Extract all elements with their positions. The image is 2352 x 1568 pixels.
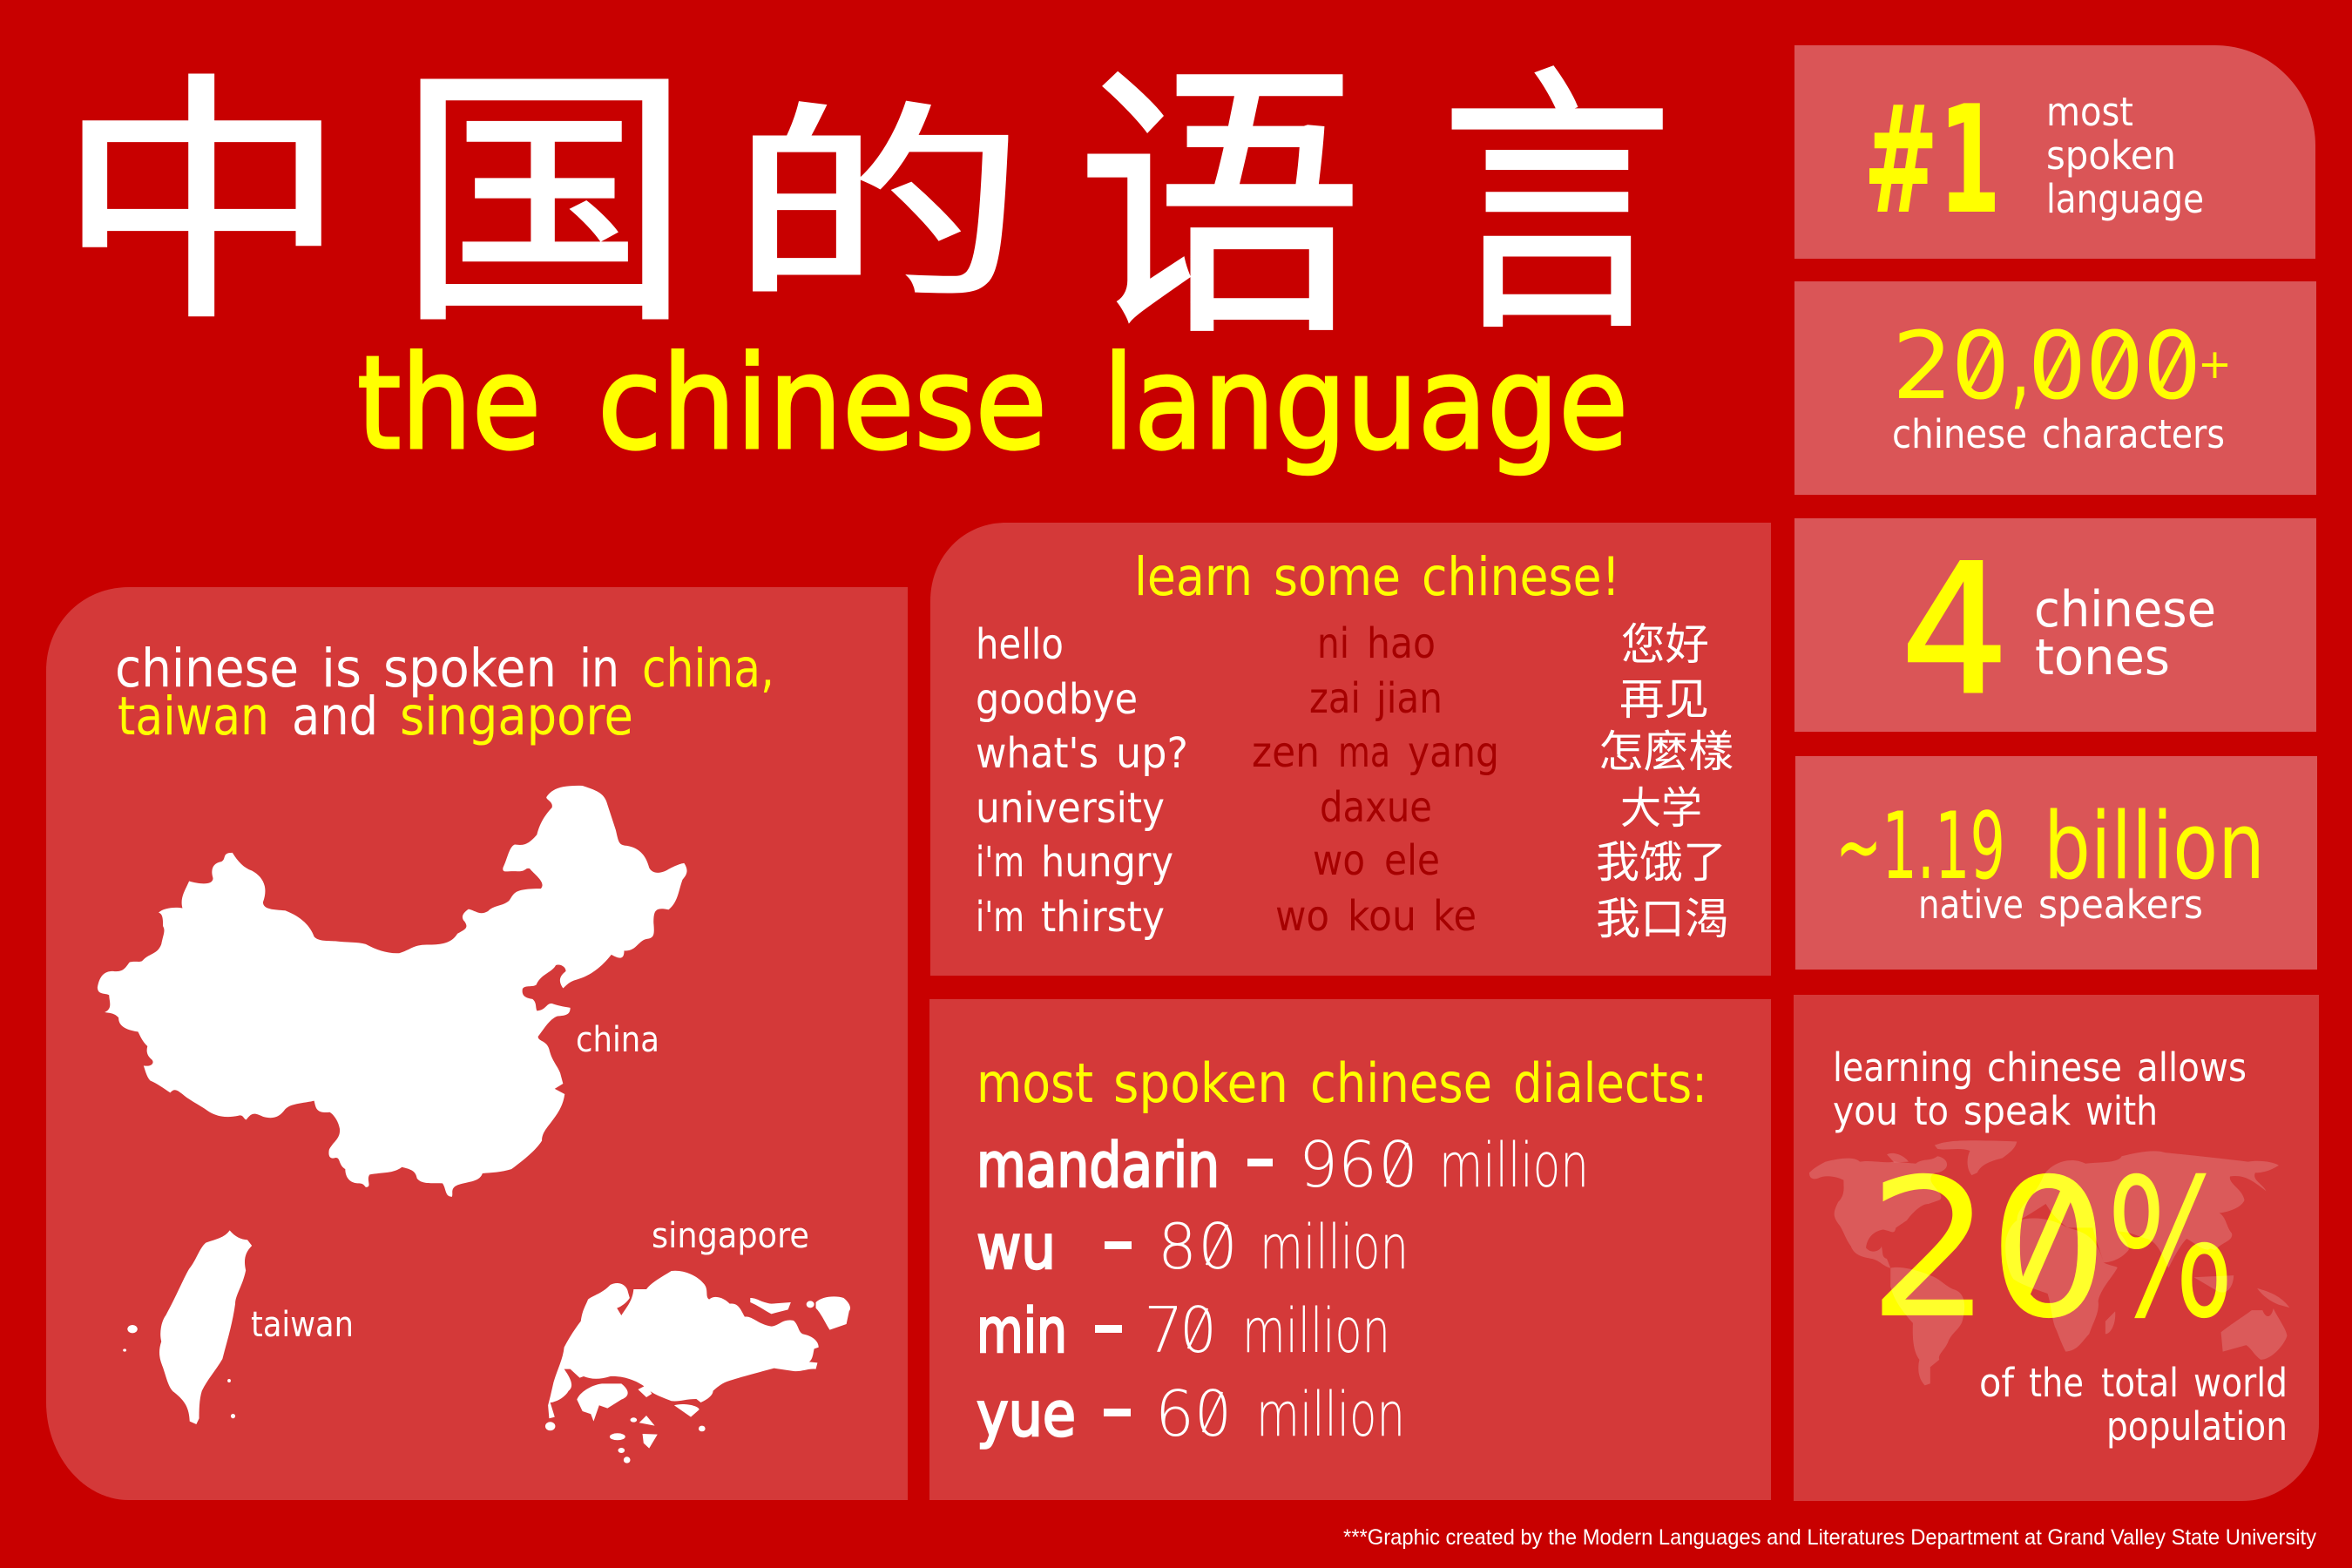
- phrases in english: university: [976, 784, 1165, 833]
- heading: where spoken: chinese: [115, 638, 299, 700]
- heading: where spoken: [115, 638, 774, 747]
- map: china: [98, 786, 687, 1197]
- caption: most spoken language: [2046, 89, 2204, 222]
- stat: 20%: 0: [1989, 1138, 2109, 1361]
- chinese title: 国: [396, 51, 693, 355]
- heading: where spoken: china,: [642, 638, 774, 700]
- stat: 20,000+: 0: [2028, 313, 2086, 421]
- phrases in english: hungry: [1041, 838, 1173, 887]
- phrases in pinyin: daxue: [1320, 783, 1432, 832]
- stat: #1: #1: [1863, 74, 2001, 247]
- caption: chinese tones: tones: [2035, 629, 2170, 686]
- world map: [1809, 1140, 2289, 1385]
- caption: chinese characters: chinese: [1892, 411, 2027, 457]
- caption: most spoken language: spoken: [2046, 132, 2176, 179]
- stat: 1.19 billion: [1835, 793, 2265, 900]
- phrases in chinese characters: 再见: [1619, 675, 1709, 724]
- stat: 20,000+: 2: [1892, 313, 1953, 421]
- heading: learn some chinese: some: [1274, 546, 1401, 608]
- phrases in pinyin: zen: [1252, 728, 1320, 777]
- phrases in pinyin: hao: [1367, 619, 1436, 668]
- chinese title: 言: [1440, 49, 1673, 363]
- english title: the: [357, 328, 541, 478]
- caption: learning chinese allows: with: [2085, 1088, 2158, 1134]
- phrases in pinyin: yang: [1408, 728, 1499, 777]
- phrases in pinyin: ni: [1317, 619, 1349, 668]
- caption: native speakers: [1918, 882, 2203, 928]
- stat: 20,000+: +: [2198, 341, 2232, 389]
- dialect: yue: million: [1256, 1379, 1405, 1450]
- dialect: yue: 0: [1194, 1377, 1232, 1450]
- dialect: wu: million: [1260, 1212, 1409, 1283]
- phrases in pinyin: zai: [1309, 674, 1361, 723]
- dialect: mandarin: [977, 1128, 1589, 1201]
- stat: 20,000+: 0: [2085, 313, 2144, 421]
- phrases in chinese characters: 我饿了: [1596, 838, 1727, 887]
- phrases in chinese characters: 我口渴: [1596, 895, 1729, 943]
- caption: learning chinese allows: learning: [1833, 1044, 1973, 1091]
- english title: [357, 328, 1628, 478]
- stat: 20%: 2: [1868, 1138, 1992, 1361]
- phrases in english: goodbye: [976, 675, 1138, 724]
- english title: language: [1103, 328, 1628, 478]
- panel: dialects: [929, 999, 1771, 1500]
- map: singapore: [545, 1271, 850, 1463]
- caption: of the total world population: [1979, 1360, 2288, 1450]
- dialect: mandarin: 96: [1299, 1128, 1377, 1201]
- heading: where spoken: singapore: [400, 686, 633, 747]
- heading: dialects: [977, 1051, 1707, 1115]
- caption: chinese tones: chinese: [2034, 581, 2216, 639]
- heading: dialects: chinese: [1310, 1051, 1492, 1115]
- stat: 20,000+: [1892, 313, 2232, 421]
- heading: where spoken: is: [321, 638, 362, 700]
- dialect: mandarin: million: [1439, 1130, 1589, 1201]
- dialect: min: min: [977, 1295, 1067, 1367]
- caption: most spoken language: most: [2046, 89, 2133, 135]
- stat: 20,000+: 0: [2143, 313, 2201, 421]
- phrases in english: i'm: [976, 838, 1024, 887]
- heading: where spoken: taiwan: [118, 686, 269, 747]
- phrases in pinyin: ke: [1433, 892, 1477, 941]
- panel: learn some chinese: [930, 523, 1771, 976]
- phrases in pinyin: ma: [1338, 728, 1390, 777]
- stat: 20%: %: [2106, 1138, 2234, 1361]
- chinese title: 的: [728, 90, 1028, 323]
- panel: characters: [1794, 281, 2316, 495]
- panel: where chinese is spoken: [46, 587, 908, 1500]
- stat: 20,000+: ,: [2010, 313, 2031, 421]
- dialect: wu: wu: [977, 1212, 1056, 1283]
- caption: of the total world population: population: [2106, 1403, 2288, 1450]
- dialect: wu: 8: [1158, 1210, 1197, 1283]
- heading: where spoken: spoken: [383, 638, 557, 700]
- dialect: wu: [977, 1210, 1409, 1283]
- caption: native speakers: native: [1918, 882, 2024, 928]
- stat: 20%: [1868, 1138, 2234, 1361]
- caption: of the total world population: world: [2193, 1360, 2288, 1406]
- heading: learn some chinese: learn: [1134, 546, 1253, 608]
- caption: of the total world population: of: [1979, 1360, 2015, 1406]
- heading: dialects: dialects:: [1513, 1051, 1707, 1115]
- dialect: min: [977, 1294, 1390, 1367]
- phrases in chinese characters: [1596, 620, 1734, 943]
- caption: learning chinese allows: allows: [2137, 1044, 2247, 1091]
- caption: most spoken language: language: [2046, 176, 2204, 222]
- stat: 20,000+: 0: [1951, 313, 2010, 421]
- dialect: min: million: [1242, 1295, 1390, 1367]
- panel: tones: [1794, 518, 2316, 734]
- english title: chinese: [598, 328, 1047, 478]
- caption: learning chinese allows: to: [1914, 1088, 1949, 1134]
- panel: most spoken language: [1794, 45, 2315, 259]
- phrases in chinese characters: 怎麼樣: [1598, 727, 1734, 776]
- panel: world population: [1794, 995, 2319, 1501]
- label: taiwan: taiwan: [251, 1305, 354, 1345]
- map: taiwan: [123, 1230, 252, 1424]
- panel: native speakers: [1795, 756, 2317, 970]
- heading: learn some chinese: [1134, 546, 1620, 608]
- chinese title: [56, 46, 1673, 368]
- phrases in pinyin: ele: [1384, 836, 1440, 885]
- dialect: yue: yue: [977, 1379, 1076, 1450]
- dialect: mandarin: 0: [1378, 1128, 1418, 1201]
- dialect: yue: [977, 1377, 1405, 1450]
- caption: native speakers: speakers: [2038, 882, 2203, 928]
- dialect: min: 0: [1179, 1294, 1217, 1367]
- stat: 4: 4: [1901, 527, 2009, 734]
- heading: learn some chinese: chinese!: [1422, 546, 1620, 608]
- caption: chinese characters: [1892, 411, 2225, 457]
- label: china: china: [576, 1020, 659, 1060]
- label: singapore: singapore: [652, 1216, 809, 1256]
- phrases in english: hello: [976, 620, 1064, 669]
- dialect: min: 7: [1144, 1294, 1184, 1367]
- dialect: mandarin: mandarin: [977, 1130, 1220, 1201]
- heading: where spoken: and: [292, 686, 378, 747]
- phrases in pinyin: wo: [1275, 892, 1329, 941]
- phrases in pinyin: wo: [1313, 836, 1365, 885]
- heading: dialects: most: [977, 1051, 1093, 1115]
- caption: chinese tones: [2034, 581, 2216, 686]
- phrases in english: up?: [1116, 729, 1188, 778]
- credit line: ***Graphic created by the Modern Languages and Literatures Department at Grand Valley State University: [1343, 1525, 2316, 1550]
- chinese title: 中: [56, 59, 348, 350]
- phrases in english: [976, 620, 1188, 942]
- stat: 1.19 billion: ~1.19: [1835, 793, 2005, 900]
- phrases in pinyin: [1252, 619, 1499, 941]
- phrases in pinyin: jian: [1375, 674, 1443, 723]
- heading: where spoken: in: [579, 638, 619, 700]
- heading: dialects: spoken: [1113, 1051, 1288, 1115]
- caption: learning chinese allows: speak: [1963, 1088, 2071, 1134]
- stat: 1.19 billion: billion: [2044, 793, 2265, 900]
- caption: of the total world population: total: [2101, 1360, 2179, 1406]
- caption: chinese characters: characters: [2042, 411, 2225, 457]
- phrases in english: what's: [976, 729, 1098, 778]
- caption: learning chinese allows: [1833, 1044, 2247, 1134]
- phrases in chinese characters: 您好: [1621, 620, 1709, 669]
- caption: of the total world population: the: [2029, 1360, 2084, 1406]
- phrases in pinyin: kou: [1348, 892, 1416, 941]
- caption: learning chinese allows: you: [1833, 1088, 1898, 1134]
- chinese title: 语: [1076, 46, 1363, 368]
- dialect: yue: 6: [1155, 1377, 1194, 1450]
- caption: learning chinese allows: chinese: [1987, 1044, 2122, 1091]
- dialect: wu: 0: [1198, 1210, 1238, 1283]
- phrases in english: thirsty: [1041, 893, 1165, 942]
- phrases in english: i'm: [976, 893, 1024, 942]
- phrases in chinese characters: 大学: [1620, 784, 1702, 833]
